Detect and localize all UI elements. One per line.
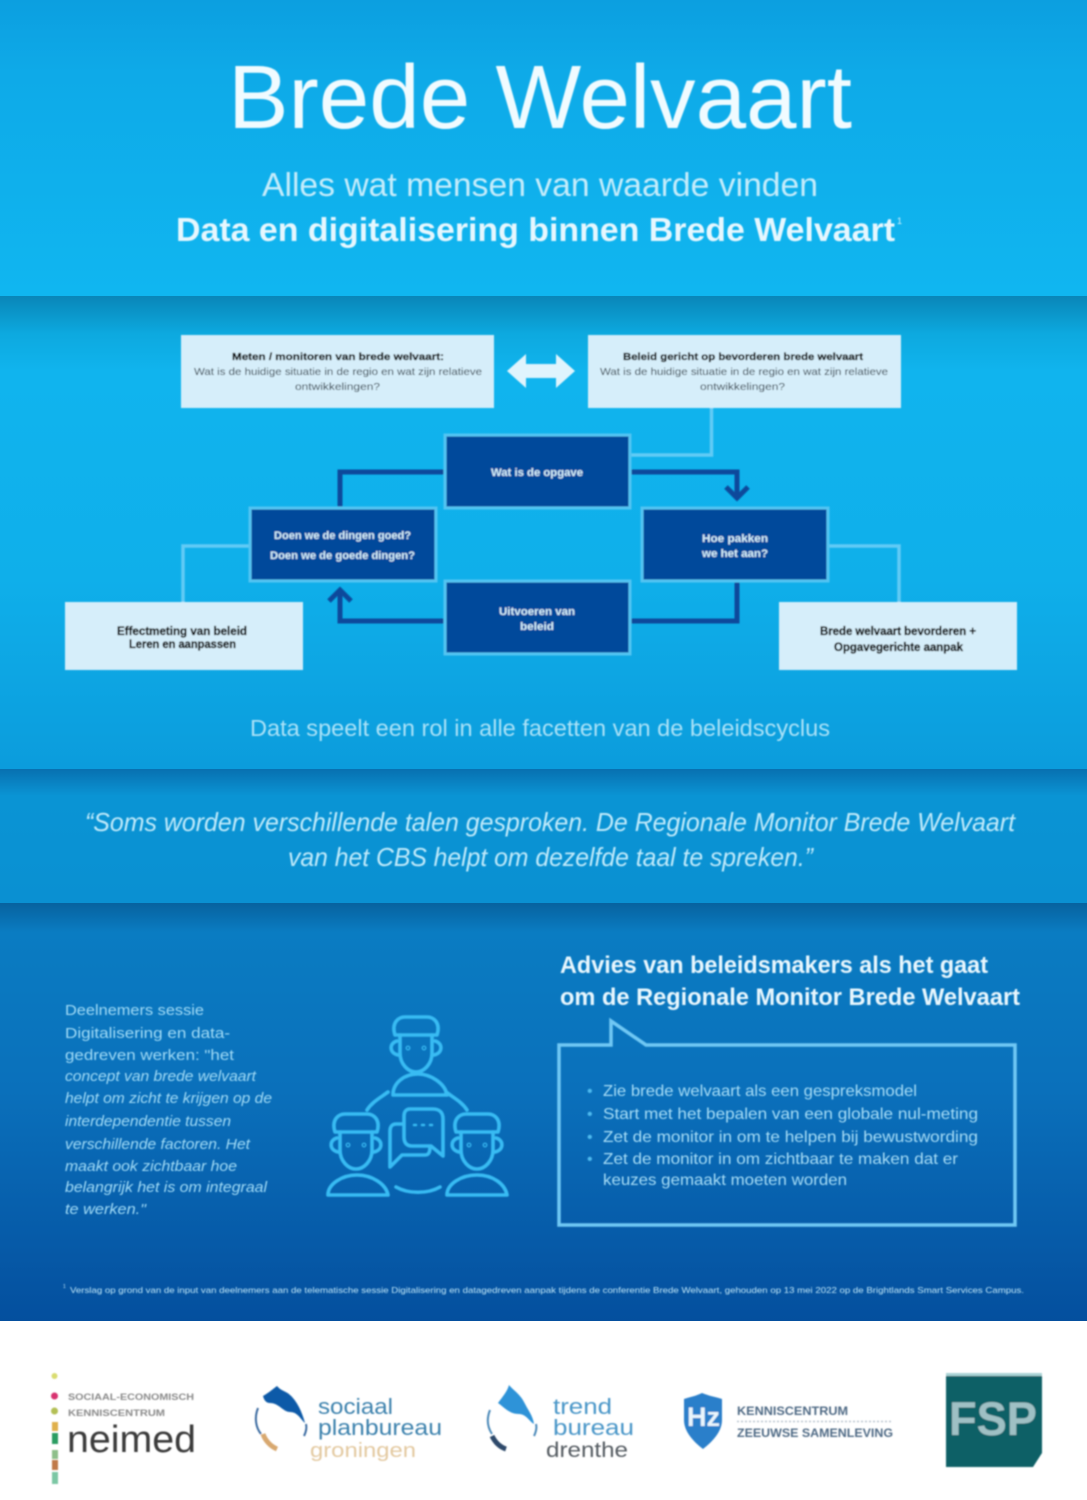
list: advice items: • <box>587 1129 593 1146</box>
text block: deelnemers sessie: Digitalisering en data- <box>65 1025 230 1042</box>
panel: advice background <box>0 903 1087 1321</box>
box: doen we de dingen goed: Doen we de dingen goed? <box>274 530 411 542</box>
icon: top person <box>391 1017 447 1095</box>
arrow: execution to evaluate <box>329 590 445 621</box>
list: advice items: Start met het bepalen van een globale nul-meting <box>603 1106 978 1123</box>
logo: trend bureau drenthe <box>488 1385 634 1462</box>
logo: sociaal planbureau groningen <box>256 1386 442 1462</box>
logo: hz kenniscentrum <box>684 1393 893 1449</box>
list: advice items: • <box>587 1151 593 1168</box>
arrow: evaluate to task <box>340 472 445 508</box>
box: hoe pakken we het aan: we het aan? <box>701 548 768 560</box>
logo: neimed: SOCIAAL-ECONOMISCH <box>68 1392 194 1403</box>
box: beleid: ontwikkelingen? <box>700 381 785 393</box>
footnote: Verslag op grond van de input van deelnemers aan de telematische sessie Digitalisering en datagedreven aanpak tijdens de conferentie Brede Welvaart, gehouden op 13 mei 2022 op de Brightlands Smart Services Campus. <box>70 1285 1024 1295</box>
logo: hz kenniscentrum: Hz <box>687 1402 720 1432</box>
caption: data speelt een rol: Data speelt een rol in alle facetten van de beleidscyclus <box>250 715 830 741</box>
quote <box>85 807 1017 872</box>
connector: right box <box>828 546 899 602</box>
icon: speech bubbles <box>390 1109 443 1167</box>
logo: sociaal planbureau groningen: planbureau <box>318 1415 442 1440</box>
connector: left box <box>183 546 250 602</box>
list: advice items: Zet de monitor in om te helpen bij bewustwording <box>603 1129 978 1146</box>
text block: deelnemers sessie: interdependentie tussen <box>65 1113 231 1130</box>
logo: trend bureau drenthe: trend <box>553 1394 612 1419</box>
box: brede welvaart bevorderen: Brede welvaart bevorderen + <box>820 626 976 638</box>
box: meten en monitoren: Wat is de huidige situatie in de regio en wat zijn relatieve <box>194 366 482 378</box>
logo: hz kenniscentrum: KENNISCENTRUM <box>737 1404 848 1418</box>
list: advice items: Zie brede welvaart als een gespreksmodel <box>603 1083 917 1100</box>
logo: hz kenniscentrum: ZEEUWSE SAMENLEVING <box>737 1426 893 1440</box>
text block: deelnemers sessie: verschillende factoren. Het <box>65 1136 251 1153</box>
list: advice items: • <box>587 1083 593 1100</box>
box: brede welvaart bevorderen <box>779 602 1017 670</box>
logo: sociaal planbureau groningen: sociaal <box>318 1394 393 1419</box>
text block: deelnemers sessie: te werken." <box>65 1201 147 1218</box>
text block: deelnemers sessie: helpt om zicht te krijgen op de <box>65 1090 272 1107</box>
box: beleid: Beleid gericht op bevorderen brede welvaart <box>623 351 864 363</box>
quote: van het CBS helpt om dezelfde taal te spreken.” <box>288 842 814 872</box>
panel: policy cycle background <box>0 296 1087 769</box>
panel: quote background <box>0 769 1087 903</box>
arrow: approach to execution <box>630 581 737 621</box>
box: wat is de opgave: Wat is de opgave <box>491 467 583 479</box>
heading: advies: Advies van beleidsmakers als het gaat <box>560 952 988 979</box>
connector: top right box to task box <box>630 408 712 455</box>
box: meten en monitoren: ontwikkelingen? <box>295 381 380 393</box>
footnote marker: 1 <box>897 216 902 226</box>
text block: deelnemers sessie: gedreven werken: "het <box>65 1047 235 1064</box>
bold subtitle: Data en digitalisering binnen Brede Welvaart <box>176 211 895 248</box>
box: brede welvaart bevorderen: Opgavegerichte aanpak <box>834 642 964 654</box>
subtitle: Alles wat mensen van waarde vinden <box>262 166 818 203</box>
arrow: task to approach <box>630 472 748 498</box>
icon: three people in conversation <box>328 1017 507 1195</box>
speech bubble outline <box>559 1021 1015 1225</box>
list: advice items: Zet de monitor in om zichtbaar te maken dat er <box>603 1151 959 1168</box>
text block: deelnemers sessie: maakt ook zichtbaar hoe <box>65 1158 237 1175</box>
box: beleid <box>588 335 901 408</box>
logo: fsp: FSP <box>949 1392 1037 1445</box>
panel: footer background <box>0 1321 1087 1500</box>
box: meten en monitoren: Meten / monitoren van brede welvaart: <box>232 351 444 363</box>
list: advice items: keuzes gemaakt moeten worden <box>603 1172 847 1189</box>
text block: deelnemers sessie: concept van brede welvaart <box>65 1068 257 1085</box>
logo: sociaal planbureau groningen: groningen <box>310 1440 416 1462</box>
box: hoe pakken we het aan <box>642 508 828 581</box>
box: wat is de opgave <box>445 435 630 508</box>
heading: advies: om de Regionale Monitor Brede Welvaart <box>560 984 1020 1011</box>
icon: right person <box>447 1114 507 1195</box>
logo: neimed <box>51 1373 196 1484</box>
logo: neimed: neimed <box>67 1419 196 1461</box>
box: effectmeting <box>65 602 303 670</box>
box: uitvoeren van beleid: beleid <box>520 621 554 633</box>
box: beleid: Wat is de huidige situatie in de regio en wat zijn relatieve <box>600 366 888 378</box>
logo: fsp <box>946 1373 1042 1467</box>
title: Brede Welvaart <box>228 48 852 148</box>
list: advice items <box>587 1083 978 1189</box>
box: hoe pakken we het aan: Hoe pakken <box>702 533 768 545</box>
logo: trend bureau drenthe: drenthe <box>546 1439 628 1462</box>
text block: deelnemers sessie: Deelnemers sessie <box>65 1002 204 1019</box>
text block: deelnemers sessie: belangrijk het is om integraal <box>65 1179 268 1196</box>
text block: deelnemers sessie <box>65 1002 272 1218</box>
logo: neimed: KENNISCENTRUM <box>68 1408 165 1419</box>
box: uitvoeren van beleid <box>445 581 630 654</box>
footnote: 1 <box>63 1284 66 1290</box>
panel: header background <box>0 0 1087 296</box>
quote: “Soms worden verschillende talen gesproken. De Regionale Monitor Brede Welvaart <box>85 807 1017 837</box>
box: doen we de dingen goed: Doen we de goede dingen? <box>270 550 415 562</box>
box: doen we de dingen goed <box>250 508 436 581</box>
icon: connecting circle arcs <box>367 1092 467 1192</box>
box: effectmeting: Leren en aanpassen <box>129 639 236 651</box>
box: uitvoeren van beleid: Uitvoeren van <box>499 606 575 618</box>
icon: left person <box>328 1114 388 1195</box>
box: meten en monitoren <box>181 335 494 408</box>
icon: double arrow <box>507 354 575 388</box>
box: effectmeting: Effectmeting van beleid <box>117 626 247 638</box>
logo: trend bureau drenthe: bureau <box>553 1415 634 1440</box>
heading: advies <box>560 952 1020 1011</box>
list: advice items: • <box>587 1106 593 1123</box>
